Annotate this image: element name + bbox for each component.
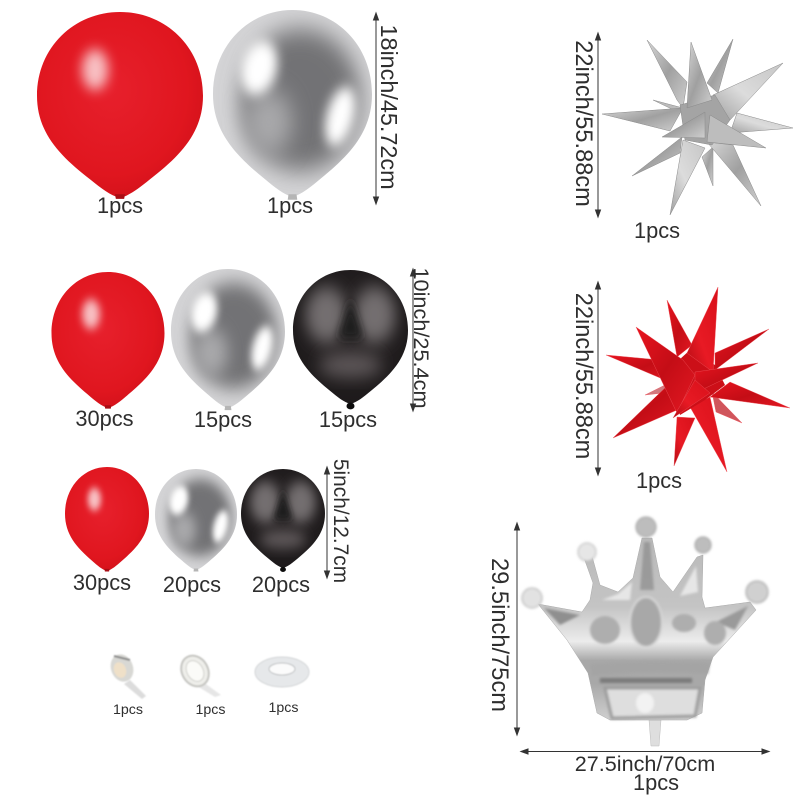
icon: glue dot roll (107, 651, 146, 699)
balloon: medium silver (171, 269, 285, 410)
dimension: 10 inch: 10inch/25.4cm (409, 267, 434, 409)
label: 1pcs crown: 1pcs (633, 770, 679, 795)
dimension: crown height (486, 523, 520, 735)
icon: silver crown balloon (522, 517, 768, 746)
dimension: 18 inch: 18inch/45.72cm (376, 24, 402, 190)
dimension: silver star 22 inch: 22inch/55.88cm (570, 40, 596, 207)
label: 1pcs large red: 1pcs (97, 193, 143, 218)
balloon: large silver (213, 10, 372, 200)
dimension: crown height: 29.5inch/75cm (486, 558, 512, 712)
label: 1pcs glue dots: 1pcs (113, 702, 143, 718)
balloon: small silver (155, 469, 237, 572)
label: 1pcs ribbon: 1pcs (269, 700, 298, 716)
dimension: red star 22 inch: 22inch/55.88cm (570, 293, 596, 459)
label: 20pcs small silver: 20pcs (163, 572, 221, 597)
balloon: medium black (293, 270, 408, 409)
label: 20pcs small black: 20pcs (252, 572, 310, 597)
icon: silver star balloon (602, 39, 793, 215)
dimension: crown width (521, 749, 769, 754)
label: 15pcs medium black: 15pcs (319, 407, 377, 432)
label: 1pcs tape: 1pcs (196, 702, 225, 718)
icon: adhesive tape roll (176, 651, 221, 697)
label: 1pcs large silver: 1pcs (267, 193, 313, 218)
label: 15pcs medium silver: 15pcs (194, 407, 252, 432)
label: 30pcs small red: 30pcs (73, 570, 131, 595)
label: 30pcs medium red: 30pcs (75, 406, 134, 431)
label: crown width: 27.5inch/70cm (575, 751, 715, 776)
balloon: large red (37, 12, 203, 199)
dimension: 5 inch: 5inch/12.7cm (329, 459, 352, 583)
label: 1pcs silver star: 1pcs (634, 218, 680, 243)
label: 1pcs red star: 1pcs (636, 468, 682, 493)
balloon: small red (65, 467, 149, 572)
balloon: small black (241, 469, 325, 572)
icon: ribbon roll (255, 657, 309, 687)
balloon: medium red (52, 272, 164, 409)
icon: red star balloon (606, 287, 790, 472)
